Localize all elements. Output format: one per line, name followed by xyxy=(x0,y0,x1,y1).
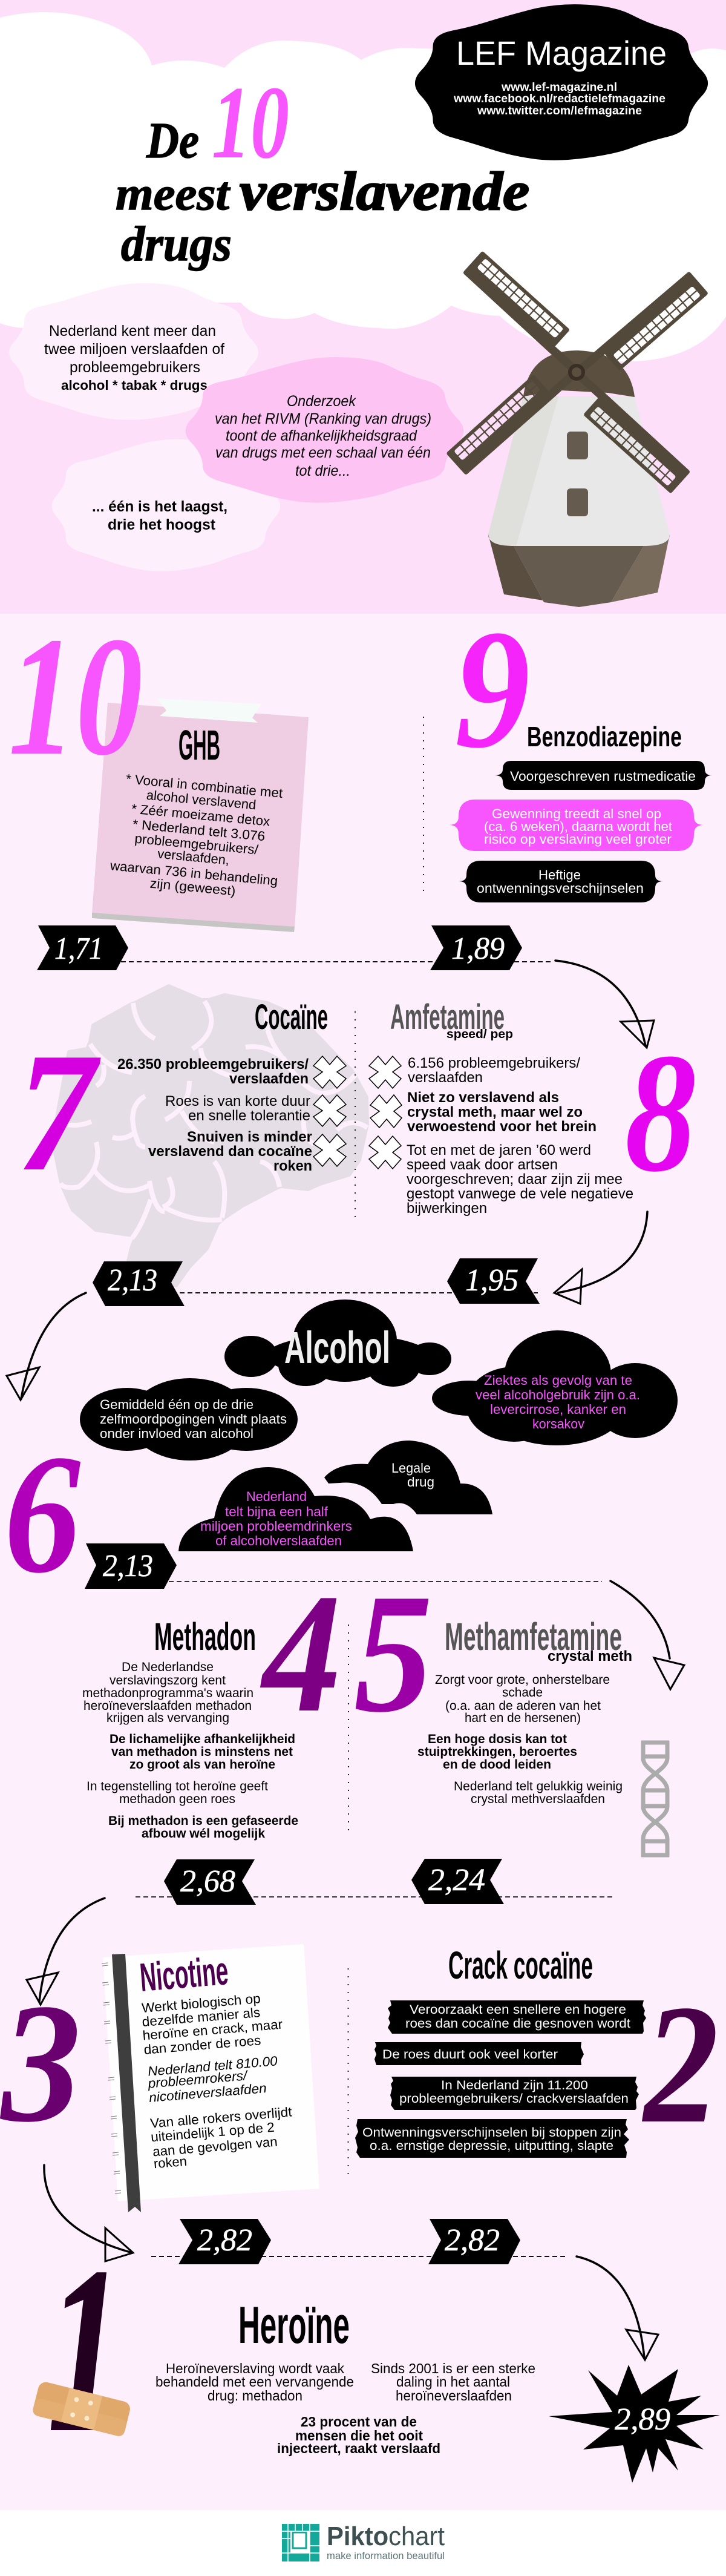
cloud probleemdrinkers: Nederland xyxy=(246,1489,307,1504)
text bold: 23 procent van de xyxy=(301,2414,417,2430)
label ontwenning xyxy=(459,861,663,902)
number 1: 1 xyxy=(47,2218,123,2482)
header background xyxy=(0,0,726,614)
label crackverslaafden xyxy=(390,2077,639,2110)
arrow 3 to 2,82 xyxy=(44,2165,133,2261)
title: verslavende xyxy=(240,162,529,222)
text nicotine: roken xyxy=(153,2154,188,2171)
text methadon: van methadon is minstens net xyxy=(111,1745,293,1759)
cloud ziektes: levercirrose, kanker en xyxy=(490,1402,626,1417)
text methadon: krijgen als vervanging xyxy=(106,1711,229,1725)
text methadon: methadon geen roes xyxy=(119,1792,235,1806)
text right: daling in het aantal xyxy=(396,2374,510,2390)
bubble: laagst hoogst xyxy=(52,439,280,571)
text GHB: verslaafden, xyxy=(157,846,230,867)
section 4: Methadon xyxy=(82,1615,298,1841)
label ontwenning: ontwenningsverschijnselen xyxy=(477,881,644,896)
arrow to 8 xyxy=(555,961,654,1048)
text nicotine: probleemrokers/ xyxy=(147,2068,249,2091)
text left: behandeld met een vervangende xyxy=(155,2374,354,2390)
title: meest xyxy=(116,167,231,220)
title: De xyxy=(146,113,199,169)
label snellere roes xyxy=(388,2000,646,2034)
text methadon: afbouw wél mogelijk xyxy=(142,1827,265,1841)
score 1,71: 1,71 xyxy=(54,932,103,966)
heading: Nicotine xyxy=(138,1948,230,2000)
text GHB: waarvan 736 in behandeling xyxy=(109,858,278,889)
bubble: laagst hoogst: ... één is het laagst, xyxy=(92,498,227,515)
text amfetamine: verslaafden xyxy=(408,1070,483,1086)
text methadon: De lichamelijke afhankelijkheid xyxy=(110,1732,295,1746)
score 1,71 xyxy=(37,925,128,970)
text GHB: * Vooral in combinatie met xyxy=(125,771,283,801)
section 5: Methamfetamine xyxy=(417,1615,669,1857)
score 1,89 xyxy=(430,925,522,970)
text amfetamine xyxy=(407,1055,633,1217)
bubble: onderzoek RIVM: Onderzoek xyxy=(287,393,356,410)
cloud ziektes: Ziektes als gevolg van te xyxy=(484,1373,632,1388)
section 7: Cocaine xyxy=(17,997,346,1206)
score 2,13 second: 2,13 xyxy=(103,1549,153,1583)
text nicotine: heroïne en crack, maar xyxy=(142,2017,283,2043)
text nicotine: Nederland telt 810.00 xyxy=(147,2053,278,2079)
heading: Crack cocaïne xyxy=(448,1944,593,1987)
text cocaine: Snuiven is minder xyxy=(187,1129,312,1145)
text methadon: heroïneverslaafden methadon xyxy=(83,1699,252,1713)
badge: LEF Magazine: LEF Magazine xyxy=(456,34,667,72)
footer logo: Piktochart: make information beautiful xyxy=(327,2550,445,2561)
section 8: Amfetamine xyxy=(369,997,696,1217)
text methadon: zo groot als van heroïne xyxy=(129,1758,275,1772)
label ontwenningsverschijnselen: o.a. ernstige depressie, uitputting, slapte xyxy=(370,2139,613,2153)
text methamfetamine: Een hoge dosis kan tot xyxy=(428,1732,567,1746)
score 2,68 xyxy=(164,1859,256,1905)
score 2,82 first xyxy=(178,2219,271,2264)
icon: crosses cocaine xyxy=(313,1056,346,1166)
timeline 2,13 to 1,95 xyxy=(180,1292,538,1293)
text methamfetamine: crystal methverslaafden xyxy=(471,1792,605,1806)
text nicotine: uiteindelijk 1 op de 2 xyxy=(150,2120,275,2144)
label snellere roes: Veroorzaakt een snellere en hogere xyxy=(410,2003,626,2017)
text methamfetamine: hart en de hersenen) xyxy=(465,1711,581,1725)
heading: Methadon xyxy=(154,1615,256,1658)
text amfetamine: crystal meth, maar wel zo xyxy=(407,1104,583,1120)
heading: Cocaïne xyxy=(255,997,328,1037)
text methamfetamine: schade xyxy=(502,1686,543,1700)
timeline 2,13 xyxy=(169,1581,602,1582)
title xyxy=(116,65,529,271)
timeline 2,82 xyxy=(151,2256,565,2257)
cloud zelfmoordpogingen: zelfmoordpogingen vindt plaats xyxy=(100,1411,287,1427)
arrow to 3 xyxy=(27,1898,105,2005)
text GHB: * Zéér moeizame detox xyxy=(131,801,270,829)
section 9: Benzodiazepine xyxy=(449,594,712,902)
text amfetamine: verwoestend voor het brein xyxy=(407,1119,597,1135)
footer logo: Piktochart: Piktochart xyxy=(327,2522,445,2551)
icon: windmill xyxy=(446,251,708,607)
bubble: verslaafden: twee miljoen verslaafden of xyxy=(44,341,224,358)
score 1,95: 1,95 xyxy=(465,1263,518,1298)
numbers 4 and 5 xyxy=(260,1559,433,1747)
label rustmedicatie: Voorgeschreven rustmedicatie xyxy=(510,769,696,784)
bubble: verslaafden: Nederland kent meer dan xyxy=(49,323,216,340)
score 2,24: 2,24 xyxy=(428,1863,485,1898)
text methadon: verslavingszorg kent xyxy=(110,1674,226,1687)
label ontwenning: Heftige xyxy=(538,867,581,882)
text amfetamine: voorgeschreven; daar zijn zij mee xyxy=(407,1171,623,1188)
text right: Sinds 2001 is er een sterke xyxy=(371,2361,535,2376)
text left: Heroïneverslaving wordt vaak xyxy=(166,2361,344,2376)
text methamfetamine: Nederland telt gelukkig weinig xyxy=(454,1779,623,1793)
arrow 8 to 1,95 xyxy=(554,1212,647,1304)
cloud probleemdrinkers: miljoen probleemdrinkers xyxy=(200,1519,352,1534)
text right: heroïneverslaafden xyxy=(396,2388,512,2404)
text methadon: De Nederlandse xyxy=(122,1660,214,1674)
star: score 2,89 xyxy=(549,2365,720,2483)
bubble: verslaafden: alcohol * tabak * drugs xyxy=(61,378,208,393)
text nicotine: Van alle rokers overlijdt xyxy=(149,2104,293,2131)
text methadon xyxy=(82,1660,298,1841)
section 10: GHB xyxy=(8,602,309,932)
cloud ziektes xyxy=(432,1330,678,1445)
score 2,13: 2,13 xyxy=(108,1263,157,1298)
cloud legale drug: drug xyxy=(407,1474,434,1490)
text nicotine xyxy=(141,1991,293,2171)
cloud zelfmoordpogingen: Gemiddeld één op de drie xyxy=(100,1397,253,1412)
text bold: injecteert, raakt verslaafd xyxy=(277,2440,440,2456)
label crackverslaafden: In Nederland zijn 11.200 xyxy=(441,2078,588,2092)
text GHB: * Nederland telt 3.076 xyxy=(132,816,266,844)
label ontwenningsverschijnselen xyxy=(355,2119,629,2158)
number 9: 9 xyxy=(455,594,530,783)
label gewenning xyxy=(449,800,704,851)
bubble: verslaafden: probleemgebruikers xyxy=(70,359,200,376)
text GHB xyxy=(109,771,283,899)
badge: LEF Magazine: www.facebook.nl/redactielefmagazine xyxy=(453,93,666,105)
badge: LEF Magazine: www.lef-magazine.nl xyxy=(501,81,617,94)
cloud probleemdrinkers xyxy=(178,1467,413,1551)
text GHB: alcohol verslavend xyxy=(146,787,257,812)
notebook paper xyxy=(102,1944,319,2212)
divider xyxy=(423,717,424,893)
star: score 2,89: 2,89 xyxy=(615,2402,670,2437)
text amfetamine: 6.156 probleemgebruikers/ xyxy=(408,1055,580,1071)
timeline 2,68 to 2,24 xyxy=(136,1896,612,1898)
numbers 4 and 5: 5 xyxy=(354,1559,433,1747)
text nicotine: aan de gevolgen van xyxy=(152,2134,278,2159)
numbers 4 and 5: 4 xyxy=(260,1559,341,1747)
cloud legale drug: Legale xyxy=(391,1460,431,1476)
icon: crosses amfetamine xyxy=(369,1056,402,1169)
text GHB: probleemgebruikers/ xyxy=(134,831,260,858)
text amfetamine: gestopt vanwege de vele negatieve xyxy=(407,1186,633,1202)
score 2,13 second xyxy=(85,1543,177,1589)
bubble: onderzoek RIVM xyxy=(186,357,463,503)
subheading: crystal meth xyxy=(548,1648,632,1664)
cloud legale drug xyxy=(324,1441,492,1514)
divider xyxy=(348,1625,349,1832)
arrow to star xyxy=(577,2256,658,2360)
score 1,95 xyxy=(447,1258,540,1304)
footer logo: Piktochart xyxy=(282,2522,445,2561)
text nicotine: nicotineverslaafden xyxy=(148,2080,267,2105)
section 3: Nicotine xyxy=(0,1944,319,2212)
score 2,68: 2,68 xyxy=(180,1864,235,1899)
text cocaine: roken xyxy=(273,1158,312,1174)
divider xyxy=(347,1968,348,2175)
score 2,13 xyxy=(93,1261,185,1306)
label roes korter: De roes duurt ook veel korter xyxy=(382,2048,558,2062)
bubble: verslaafden xyxy=(9,283,258,420)
score 2,24 xyxy=(411,1859,504,1904)
number 8: 8 xyxy=(625,1018,696,1207)
text cocaine: verslaafden xyxy=(229,1071,309,1087)
number 3: 3 xyxy=(0,1968,81,2157)
text left: drug: methadon xyxy=(208,2388,302,2404)
label gewenning: Gewenning treedt al snel op xyxy=(492,806,661,821)
white cloud xyxy=(0,12,726,361)
bubble: laagst hoogst: drie het hoogst xyxy=(108,516,216,533)
section 10: GHB: GHB xyxy=(178,721,220,769)
text bold xyxy=(277,2414,440,2456)
number 6: 6 xyxy=(4,1419,80,1608)
bubble: onderzoek RIVM: tot drie... xyxy=(295,462,350,479)
cloud zelfmoordpogingen xyxy=(80,1378,298,1460)
note paper xyxy=(92,698,309,932)
title: drugs xyxy=(121,216,232,271)
text cocaine: en snelle tolerantie xyxy=(188,1108,310,1124)
cloud Alcohol xyxy=(224,1300,451,1387)
icon: bandage xyxy=(31,2380,132,2437)
text cocaine: 26.350 probleemgebruikers/ xyxy=(117,1056,309,1073)
text cocaine: verslavend dan cocaïne xyxy=(148,1143,312,1160)
icon: logo squares xyxy=(282,2524,319,2561)
label gewenning: (ca. 6 weken), daarna wordt het xyxy=(484,819,672,834)
score 2,82 second: 2,82 xyxy=(445,2223,500,2258)
section 6: Alcohol xyxy=(4,1300,678,1608)
text methadon: methadonprogramma's waarin xyxy=(82,1686,253,1700)
cloud probleemdrinkers: telt bijna een half xyxy=(225,1504,329,1519)
cloud Alcohol: Alcohol xyxy=(284,1322,390,1373)
text methamfetamine xyxy=(417,1673,623,1806)
heading: Amfetamine xyxy=(390,997,505,1037)
text right xyxy=(371,2361,535,2404)
text methamfetamine: en de dood leiden xyxy=(443,1758,551,1772)
label ontwenningsverschijnselen: Ontwenningsverschijnselen bij stoppen zijn xyxy=(362,2126,621,2140)
text amfetamine: speed vaak door artsen xyxy=(407,1157,558,1173)
text methamfetamine: stuiptrekkingen, beroertes xyxy=(417,1745,577,1759)
bubble: onderzoek RIVM: van drugs met een schaal van één xyxy=(215,444,431,461)
cloud zelfmoordpogingen: onder invloed van alcohol xyxy=(100,1426,253,1441)
icon: DNA xyxy=(641,1741,669,1857)
label crackverslaafden: probleemgebruikers/ crackverslaafden xyxy=(399,2092,629,2106)
cloud probleemdrinkers: of alcoholverslaafden xyxy=(215,1533,342,1548)
score 1,89: 1,89 xyxy=(451,932,505,966)
badge: LEF Magazine: www.twitter.com/lefmagazine xyxy=(477,105,642,117)
text nicotine: dan zonder de roes xyxy=(143,2032,261,2057)
text cocaine xyxy=(117,1056,312,1174)
score 2,82 first: 2,82 xyxy=(197,2223,252,2258)
text methamfetamine: Zorgt voor grote, onherstelbare xyxy=(435,1673,610,1687)
text methadon: In tegenstelling tot heroïne geeft xyxy=(87,1779,268,1793)
score 2,82 second xyxy=(428,2219,520,2264)
text amfetamine: Tot en met de jaren ’60 werd xyxy=(407,1142,591,1158)
cloud ziektes: korsakov xyxy=(532,1416,584,1431)
badge: LEF Magazine xyxy=(415,4,708,160)
icon: brain xyxy=(54,986,367,1286)
label roes korter xyxy=(374,2042,584,2065)
number 10: 10 xyxy=(8,602,143,790)
text nicotine: dezelfde manier als xyxy=(142,2005,261,2029)
heading: Heroïne xyxy=(238,2296,350,2354)
divider xyxy=(355,1011,356,1218)
arrow to 5 xyxy=(610,1581,684,1689)
bubble: onderzoek RIVM: toont de afhankelijkheidsgraad xyxy=(226,427,417,444)
text amfetamine: Niet zo verslavend als xyxy=(407,1089,559,1106)
text nicotine: Werkt biologisch op xyxy=(141,1991,261,2016)
label gewenning: risico op verslaving veel groter xyxy=(484,832,672,847)
text GHB: zijn (geweest) xyxy=(149,876,237,899)
title: 10 xyxy=(212,65,289,180)
text cocaine: Roes is van korte duur xyxy=(165,1093,310,1109)
text left xyxy=(155,2361,354,2404)
arrow 2,13 to 6 xyxy=(7,1293,86,1400)
label rustmedicatie xyxy=(494,761,712,790)
label snellere roes: roes dan cocaïne die gesnoven wordt xyxy=(405,2017,630,2031)
text methamfetamine: (o.a. aan de aderen van het xyxy=(445,1699,601,1713)
text methadon: Bij methadon is een gefaseerde xyxy=(108,1814,298,1828)
text amfetamine: bijwerkingen xyxy=(407,1200,487,1217)
section 2: Crack cocaine xyxy=(355,1944,719,2158)
bubble: onderzoek RIVM: van het RIVM (Ranking van drugs) xyxy=(215,410,431,427)
cloud ziektes: veel alcoholgebruik zijn o.a. xyxy=(476,1387,640,1402)
subheading: speed/ pep xyxy=(446,1028,513,1041)
footer background xyxy=(0,2510,726,2576)
text bold: mensen die het ooit xyxy=(295,2428,423,2443)
timeline 1,71 to 1,89 xyxy=(121,961,551,962)
number 7: 7 xyxy=(17,1017,103,1206)
section 1: Heroine xyxy=(31,2218,535,2482)
